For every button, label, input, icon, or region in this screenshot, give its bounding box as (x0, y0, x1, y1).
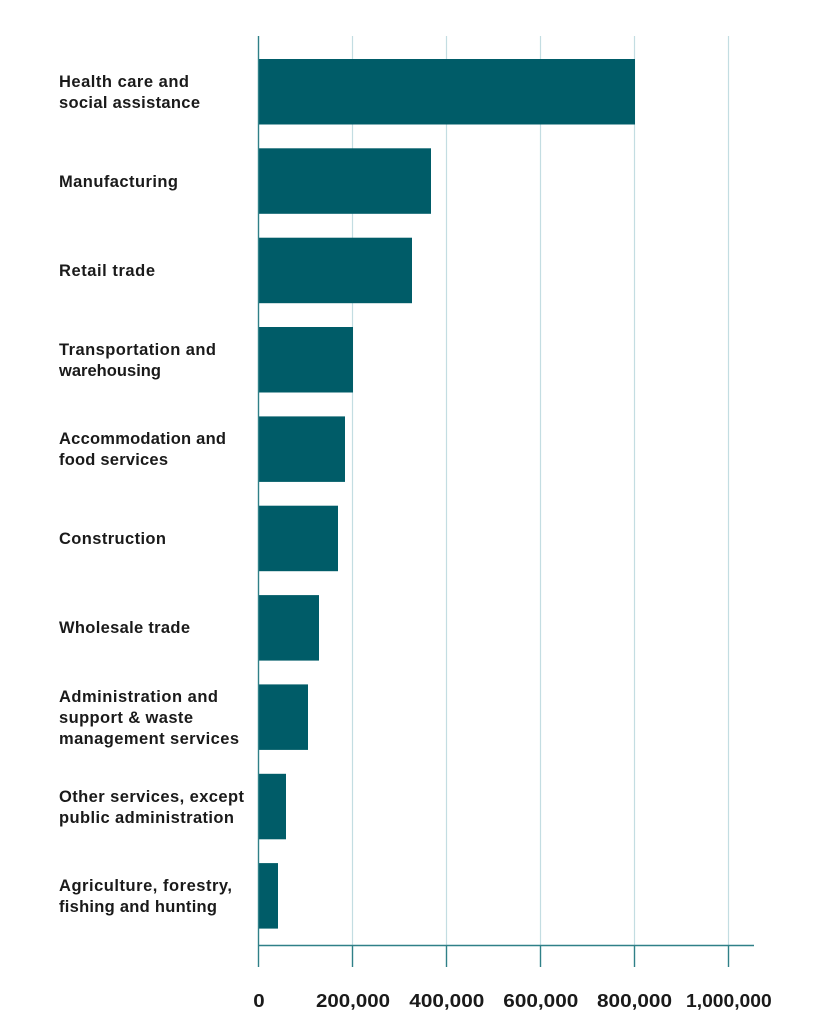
category labels (58, 73, 244, 916)
axis value labels: 800,000 (597, 991, 672, 1011)
category labels: Retail trade (59, 262, 155, 280)
category labels: Agriculture, forestry, (59, 877, 232, 895)
category labels: Administration and (59, 688, 218, 706)
grid lines (352, 36, 728, 945)
category labels: warehousing (58, 362, 161, 380)
category labels: support & waste (59, 709, 193, 727)
category labels: public administration (59, 809, 234, 827)
category labels: food services (59, 451, 168, 469)
category labels: social assistance (59, 94, 200, 112)
bars (258, 59, 635, 929)
category labels: Other services, except (59, 788, 244, 806)
category labels: management services (59, 730, 239, 748)
category labels: Wholesale trade (59, 619, 190, 637)
category labels: Transportation and (59, 341, 216, 359)
axis value labels: 200,000 (316, 991, 390, 1011)
axes (258, 36, 754, 967)
axis value labels: 400,000 (409, 991, 484, 1011)
axis value labels (253, 991, 772, 1011)
category labels: Accommodation and (59, 430, 226, 448)
category labels: Health care and (59, 73, 189, 91)
category labels: fishing and hunting (59, 898, 217, 916)
category labels: Construction (59, 530, 166, 548)
axis value labels: 1,000,000 (686, 991, 772, 1011)
category labels: Manufacturing (59, 173, 178, 191)
axis value labels: 0 (253, 991, 265, 1011)
axis value labels: 600,000 (503, 991, 578, 1011)
